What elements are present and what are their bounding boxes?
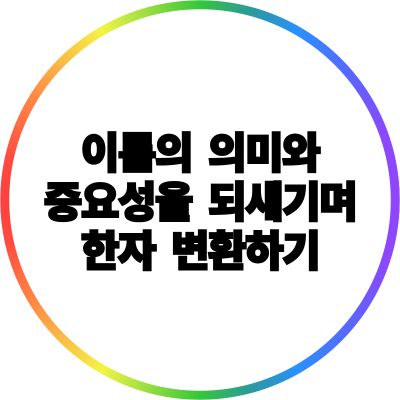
title: 중요성을 되새기며	[44, 179, 356, 226]
title: 이름의 의미와	[81, 130, 319, 177]
title: 한자 변환하기	[81, 228, 319, 275]
